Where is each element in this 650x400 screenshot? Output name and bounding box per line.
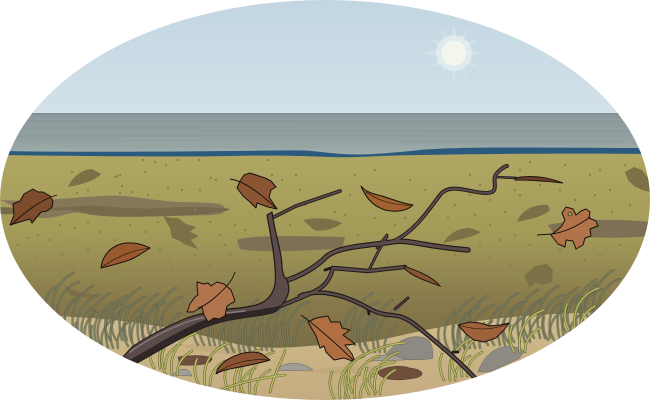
front grass bbox=[150, 288, 599, 398]
leaf: narrow curved centre right bbox=[361, 186, 413, 211]
speckled soil bbox=[18, 160, 630, 292]
leaf: left brown jagged bbox=[10, 189, 57, 225]
leaf: top centre jagged bbox=[230, 173, 277, 209]
leaf shadows on ground bbox=[63, 167, 650, 297]
back grass bbox=[38, 270, 620, 352]
leaf: narrow on upper twig bbox=[515, 176, 563, 183]
water bbox=[0, 113, 650, 157]
rocks bbox=[172, 337, 523, 376]
foreground grass blades bbox=[215, 343, 405, 392]
leaf: oak right bbox=[537, 207, 598, 249]
waterline bbox=[0, 148, 650, 157]
leaf: bottom left narrow bbox=[216, 352, 270, 374]
leaf: narrow on middle twig bbox=[404, 266, 440, 286]
icon: sun bbox=[427, 26, 481, 80]
leaf: oak centre bbox=[301, 315, 355, 362]
trunk underside shadow bbox=[130, 305, 282, 363]
flat brown stones bbox=[178, 356, 422, 380]
main trunk bbox=[123, 212, 289, 363]
branch fill bbox=[272, 166, 516, 378]
leaf: left hanging bbox=[101, 243, 150, 268]
sand ripple bbox=[181, 344, 409, 371]
sky bbox=[32, 0, 618, 113]
leaf: oak left bbox=[187, 272, 235, 322]
fallen branch bbox=[123, 166, 516, 378]
mud stripes bbox=[0, 196, 650, 251]
ground bbox=[0, 152, 650, 362]
trunk highlight bbox=[130, 311, 245, 352]
branch outline bbox=[272, 166, 516, 378]
leaf: right lower bbox=[458, 322, 509, 342]
sand bank bbox=[60, 312, 592, 400]
